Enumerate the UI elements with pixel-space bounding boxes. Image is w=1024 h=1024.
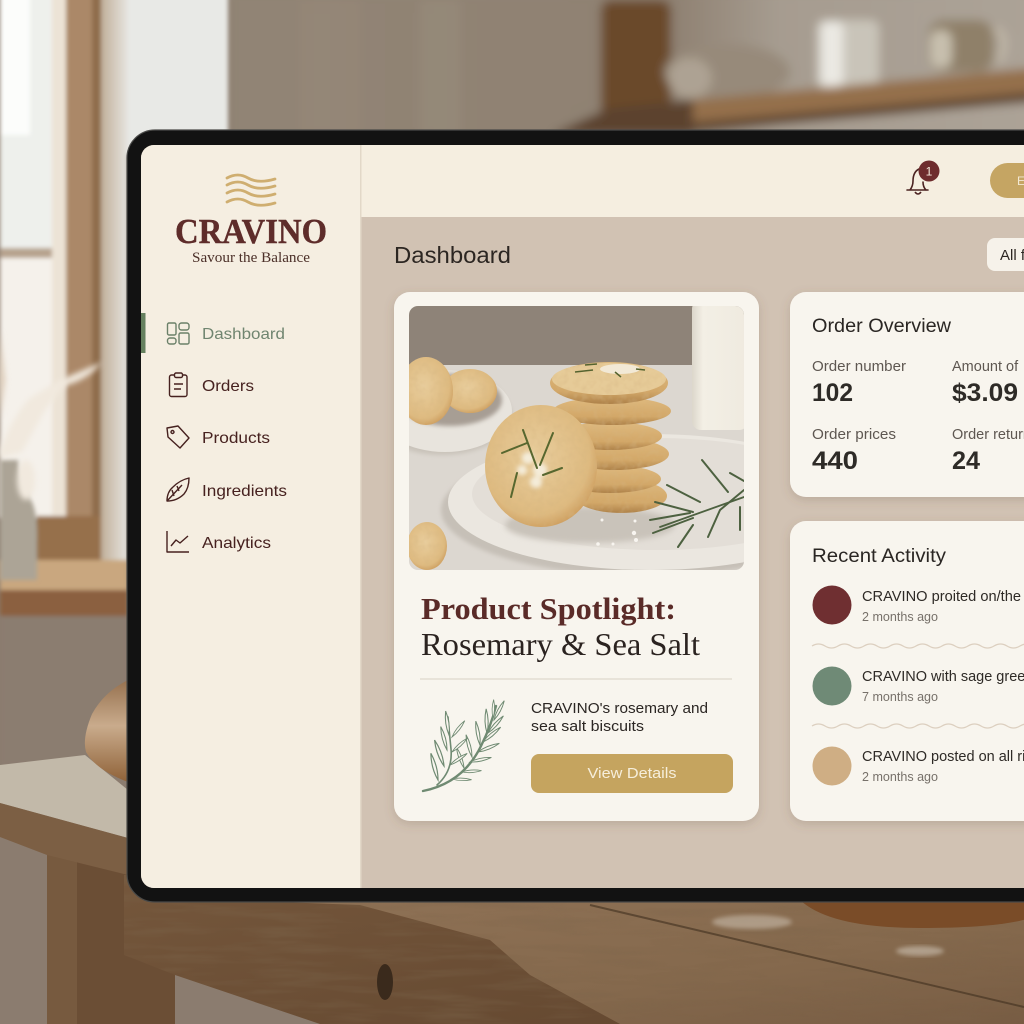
nav item: Dashboard (168, 323, 285, 344)
spotlight subtitle: Rosemary & Sea Salt (421, 626, 700, 662)
toppings on top biscuit (575, 364, 645, 377)
stat: order number (812, 360, 906, 401)
vase with dried plumes (0, 330, 102, 580)
stat: order number: Order number (812, 359, 906, 375)
nav item: Ingredients (167, 478, 287, 501)
spotlight description: sea salt biscuits (531, 719, 644, 735)
active nav indicator (141, 313, 146, 353)
activity item one: 2 months ago (862, 610, 938, 624)
activity item three (812, 746, 1024, 786)
tablet screen (141, 145, 1024, 888)
order overview heading: Order Overview (812, 316, 951, 337)
back wall and shelf, blurred (228, 0, 1024, 150)
table legs and apron (47, 855, 620, 1024)
activity item one (812, 586, 1021, 624)
nav item: Products (167, 426, 270, 448)
nav item: Products: Products (202, 430, 270, 447)
view details button: View Details (588, 766, 676, 782)
biscuit stack (550, 362, 671, 513)
nav item: Ingredients: Ingredients (202, 483, 287, 500)
view details button (531, 754, 733, 793)
bread loaves (85, 680, 1024, 928)
nav item: Analytics: Analytics (202, 535, 271, 552)
tablet device (127, 130, 1024, 902)
activity item two: 7 months ago (862, 690, 938, 704)
icon: notification bell with badge (907, 160, 940, 194)
stat: order number: 102 (812, 379, 853, 407)
stat: order prices: Order prices (812, 427, 896, 443)
stat: amount (952, 359, 1019, 407)
top bar (361, 145, 1024, 217)
stat: order prices (812, 427, 896, 475)
activity item one: CRAVINO proited on/the (862, 589, 1021, 605)
activity item three: 2 months ago (862, 770, 938, 784)
page heading: Dashboard (394, 242, 511, 268)
recent activity heading: Recent Activity (812, 545, 946, 567)
sidebar (141, 145, 362, 888)
icon: notification bell with badge: 1 (926, 164, 933, 178)
icon: rosemary illustration (423, 700, 506, 791)
panel: recent activity (790, 521, 1024, 821)
logo waves (227, 175, 275, 205)
stat: order prices: 440 (812, 447, 858, 475)
brand name: CRAVINO (175, 212, 327, 251)
rosemary sprig in photo (650, 460, 744, 547)
table top surface (0, 755, 1024, 1024)
activity item two (812, 666, 1024, 706)
sea salt flakes (596, 518, 638, 546)
back plate and cookies (409, 357, 512, 456)
nav item: Orders: Orders (202, 378, 254, 395)
tablet bezel (127, 130, 1024, 902)
nav item: Analytics (167, 531, 271, 552)
spotlight description: CRAVINO's rosemary and (531, 701, 708, 717)
spotlight description (532, 702, 707, 731)
window with wooden frame, blurred (0, 0, 228, 766)
panel: order overview (790, 292, 1024, 497)
filter button (987, 238, 1024, 271)
spotlight title: Product Spotlight: (421, 591, 676, 626)
stat: order returns (952, 427, 1024, 475)
nav item: Dashboard: Dashboard (202, 326, 285, 343)
account button (990, 163, 1024, 198)
small front biscuit (407, 522, 447, 570)
stat: amount: Amount of (952, 359, 1019, 375)
nav item: Orders (170, 373, 254, 396)
stat: amount: $3.09 (952, 379, 1018, 407)
panel: product spotlight card (392, 292, 761, 826)
stat: order returns: 24 (952, 447, 980, 475)
product photo: rosemary biscuits (409, 306, 744, 570)
main plate (440, 434, 744, 570)
brand tagline: Savour the Balance (192, 250, 310, 266)
leaning biscuit (485, 405, 597, 527)
milk glass (692, 306, 744, 430)
